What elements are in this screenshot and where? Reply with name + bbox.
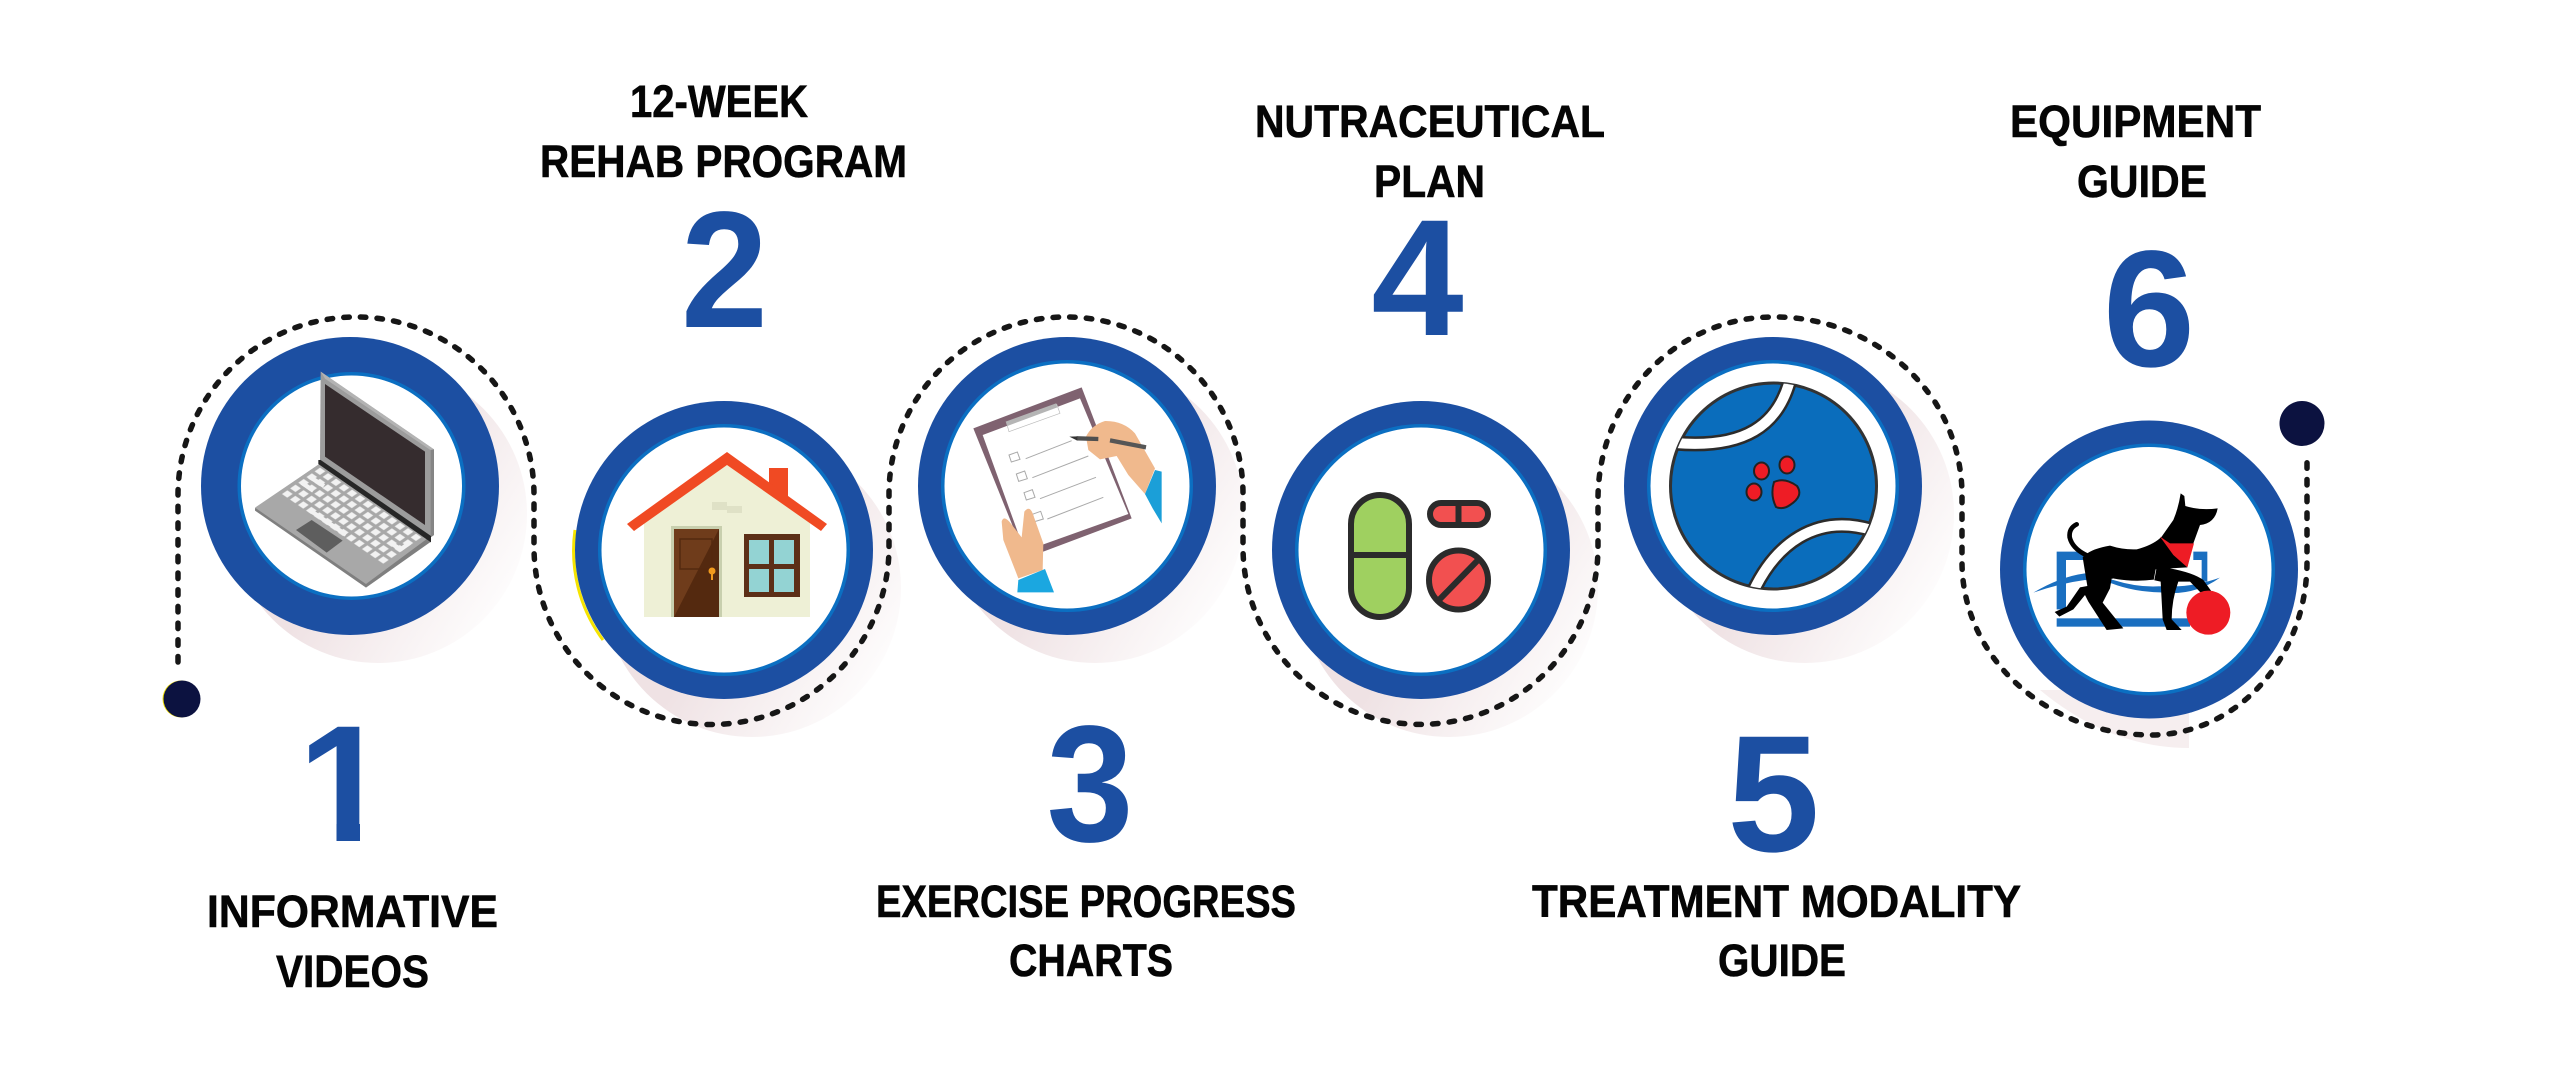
icon: laptop: [255, 372, 434, 588]
icon: dog with ball: [2033, 493, 2230, 635]
label: treatment modality guide: GUIDE: [1718, 935, 1846, 986]
number 4: 4: [1371, 186, 1464, 371]
infographic: [162, 84, 2324, 988]
drop shadows: [229, 365, 2189, 748]
icon: house: [627, 452, 827, 617]
number 1: 1: [298, 692, 390, 877]
number 5: 5: [1727, 702, 1820, 887]
label: 12-week rehab program: [540, 76, 907, 187]
step 2 circle: rehab program: [574, 401, 873, 699]
label: nutraceutical plan: PLAN: [1374, 156, 1485, 207]
label: nutraceutical plan: [1255, 96, 1605, 207]
label: informative videos: VIDEOS: [276, 946, 429, 997]
end dot: [2280, 401, 2324, 446]
label: 12-week rehab program: REHAB PROGRAM: [540, 136, 907, 187]
step 6 circle: equipment guide: [2000, 420, 2298, 718]
step 1 circle: informative videos: [201, 337, 499, 635]
label: treatment modality guide: [1532, 876, 2021, 986]
label: exercise progress charts: [876, 876, 1296, 986]
label: nutraceutical plan: NUTRACEUTICAL: [1255, 96, 1605, 147]
label: equipment guide: [2010, 96, 2261, 207]
start dot: [162, 680, 200, 718]
label: informative videos: [207, 886, 498, 997]
step 4 circle: nutraceutical plan: [1272, 401, 1570, 699]
number 3: 3: [1046, 692, 1134, 877]
label: treatment modality guide: TREATMENT MODALITY: [1532, 876, 2021, 927]
label: equipment guide: EQUIPMENT: [2010, 96, 2261, 147]
icon: pills: [1351, 495, 1488, 617]
step 3 circle: progress charts: [918, 337, 1216, 635]
label: 12-week rehab program: 12-WEEK: [630, 76, 808, 127]
label: informative videos: INFORMATIVE: [207, 886, 498, 937]
number 6: 6: [2103, 217, 2195, 402]
icon: blue ball with paw: [1670, 380, 1876, 592]
label: exercise progress charts: CHARTS: [1009, 935, 1173, 986]
label: equipment guide: GUIDE: [2077, 156, 2207, 207]
number 2: 2: [681, 178, 768, 363]
icon: clipboard and hands: [973, 387, 1162, 592]
step 5 circle: treatment modality: [1624, 337, 1922, 635]
dashed connector path: [178, 317, 2307, 735]
label: exercise progress charts: EXERCISE PROGRESS: [876, 876, 1296, 927]
